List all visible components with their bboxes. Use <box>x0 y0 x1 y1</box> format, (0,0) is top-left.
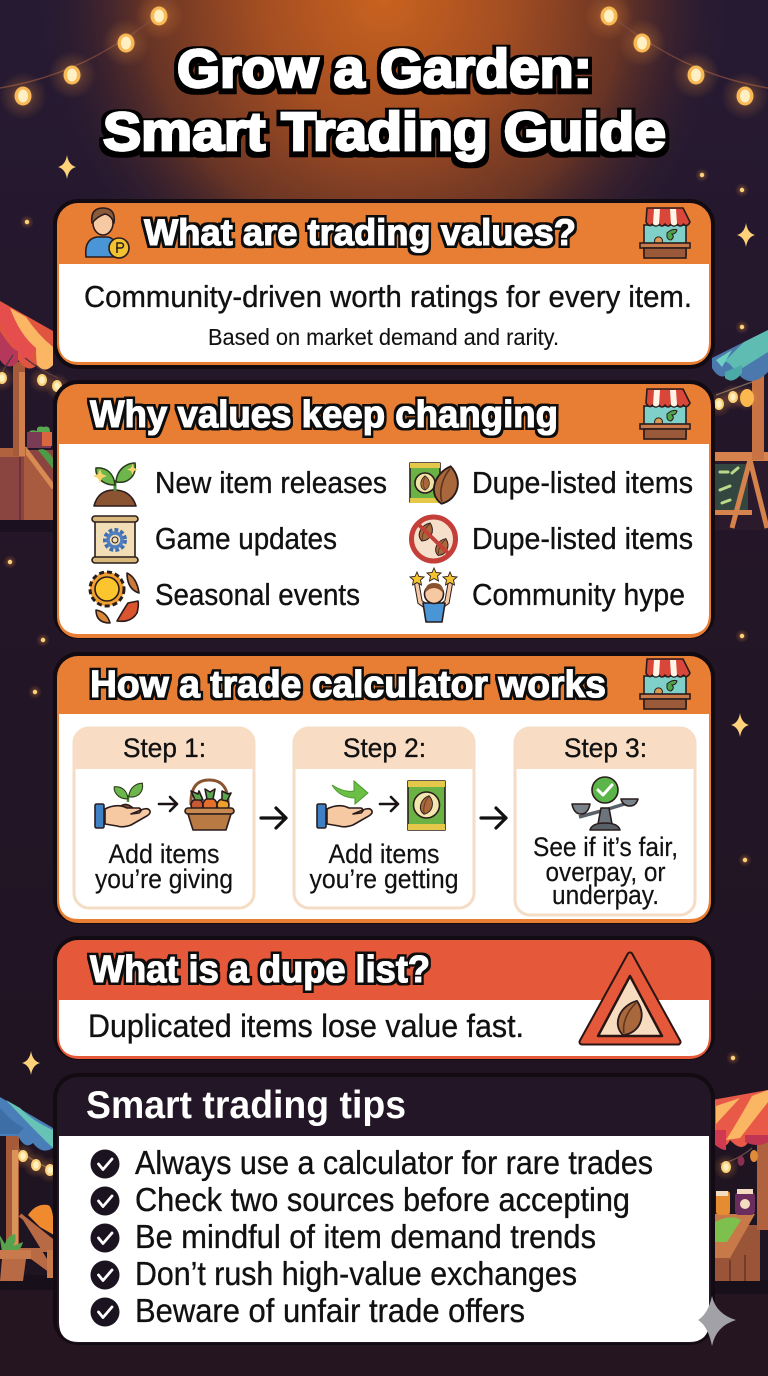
icon: hand with green arrow <box>317 781 372 828</box>
panel: what are trading values <box>53 199 715 369</box>
icon: market stall <box>640 389 690 439</box>
panel: why values keep changing <box>53 380 715 639</box>
panel: what is a dupe list <box>53 936 715 1060</box>
icon: person with coin <box>86 208 129 258</box>
icon: scroll with gear <box>92 516 138 563</box>
heading: smart trading tips: Smart trading tips <box>86 1084 406 1127</box>
panel: how a trade calculator works <box>53 652 715 924</box>
title: Grow a Garden: <box>177 39 592 99</box>
text: add items you're getting: Add items <box>328 839 440 869</box>
icon: balance scale with check <box>572 777 638 830</box>
card: step 1: you’re giving <box>95 864 233 894</box>
icon: cheering person with stars <box>410 568 457 622</box>
tip 3: Be mindful of item demand trends <box>135 1218 596 1255</box>
text: definition: Community-driven worth ratings for every item. <box>84 279 692 314</box>
tip 2: Check two sources before accepting <box>135 1181 630 1218</box>
card: step 3: overpay, or <box>546 857 666 887</box>
arrow: small <box>159 797 177 811</box>
heading: step 1: Step 1: <box>123 733 206 763</box>
icon: vegetable basket <box>185 780 234 830</box>
heading: what are trading values: What are trading values? <box>144 212 576 253</box>
text: basis: Based on market demand and rarity. <box>208 324 559 350</box>
icon: hand with sprout <box>95 783 150 828</box>
card: step 2 <box>294 728 474 908</box>
card: step 3 <box>515 728 695 915</box>
tip 1: Always use a calculator for rare trades <box>135 1144 653 1181</box>
panel: smart trading tips <box>53 1073 715 1345</box>
icon: seed packet <box>408 781 445 830</box>
icon: crossed out seeds <box>412 517 456 561</box>
icon: market stall <box>640 208 690 258</box>
icon: market stall <box>640 659 690 709</box>
arrow: small <box>380 797 398 811</box>
text: dupe-listed items second: Dupe-listed items <box>472 521 693 556</box>
heading: what is a dupe list: What is a dupe list? <box>90 949 430 991</box>
string lights: top right <box>585 0 768 120</box>
icon: warning triangle with seed <box>582 955 678 1042</box>
title: Smart Trading Guide <box>103 102 666 162</box>
market stall: upper right <box>706 330 768 530</box>
text: game updates: Game updates <box>155 521 337 556</box>
sparkles and light specks <box>3 155 755 1075</box>
card: step 1 <box>74 728 254 908</box>
market stall: lower right <box>712 1090 768 1294</box>
arrow: step 1 to step 2 <box>261 808 286 828</box>
market stall: upper left <box>0 301 70 532</box>
market stall: lower left <box>0 1097 63 1290</box>
heading: how a trade calculator works: How a trade calculator works <box>90 664 606 706</box>
tip 5: Beware of unfair trade offers <box>135 1292 525 1329</box>
text: community hype: Community hype <box>472 577 685 612</box>
text: see if it's fair, overpay, or underpay: See if it’s fair, <box>533 832 678 862</box>
card: step 2: you’re getting <box>310 864 458 894</box>
text: duplicated items: Duplicated items lose value fast. <box>88 1008 524 1044</box>
heading: step 2: Step 2: <box>343 733 426 763</box>
card: step 3: underpay. <box>552 880 659 910</box>
heading: step 3: Step 3: <box>564 733 647 763</box>
tip 4: Don’t rush high-value exchanges <box>135 1255 577 1292</box>
heading: why values keep changing: Why values keep changing <box>90 394 558 436</box>
icon: four-point star watermark <box>698 1296 736 1346</box>
icon: sun and leaves <box>90 572 139 623</box>
icon: seed packet and seed <box>410 463 462 506</box>
text: new item releases: New item releases <box>155 465 387 500</box>
title <box>103 39 666 162</box>
text: seasonal events: Seasonal events <box>155 577 360 612</box>
text: add items you're giving: Add items <box>108 839 220 869</box>
icon: sprout <box>93 463 138 506</box>
arrow: step 2 to step 3 <box>481 808 506 828</box>
string lights: top left <box>0 0 183 120</box>
text: dupe-listed items: Dupe-listed items <box>472 465 693 500</box>
